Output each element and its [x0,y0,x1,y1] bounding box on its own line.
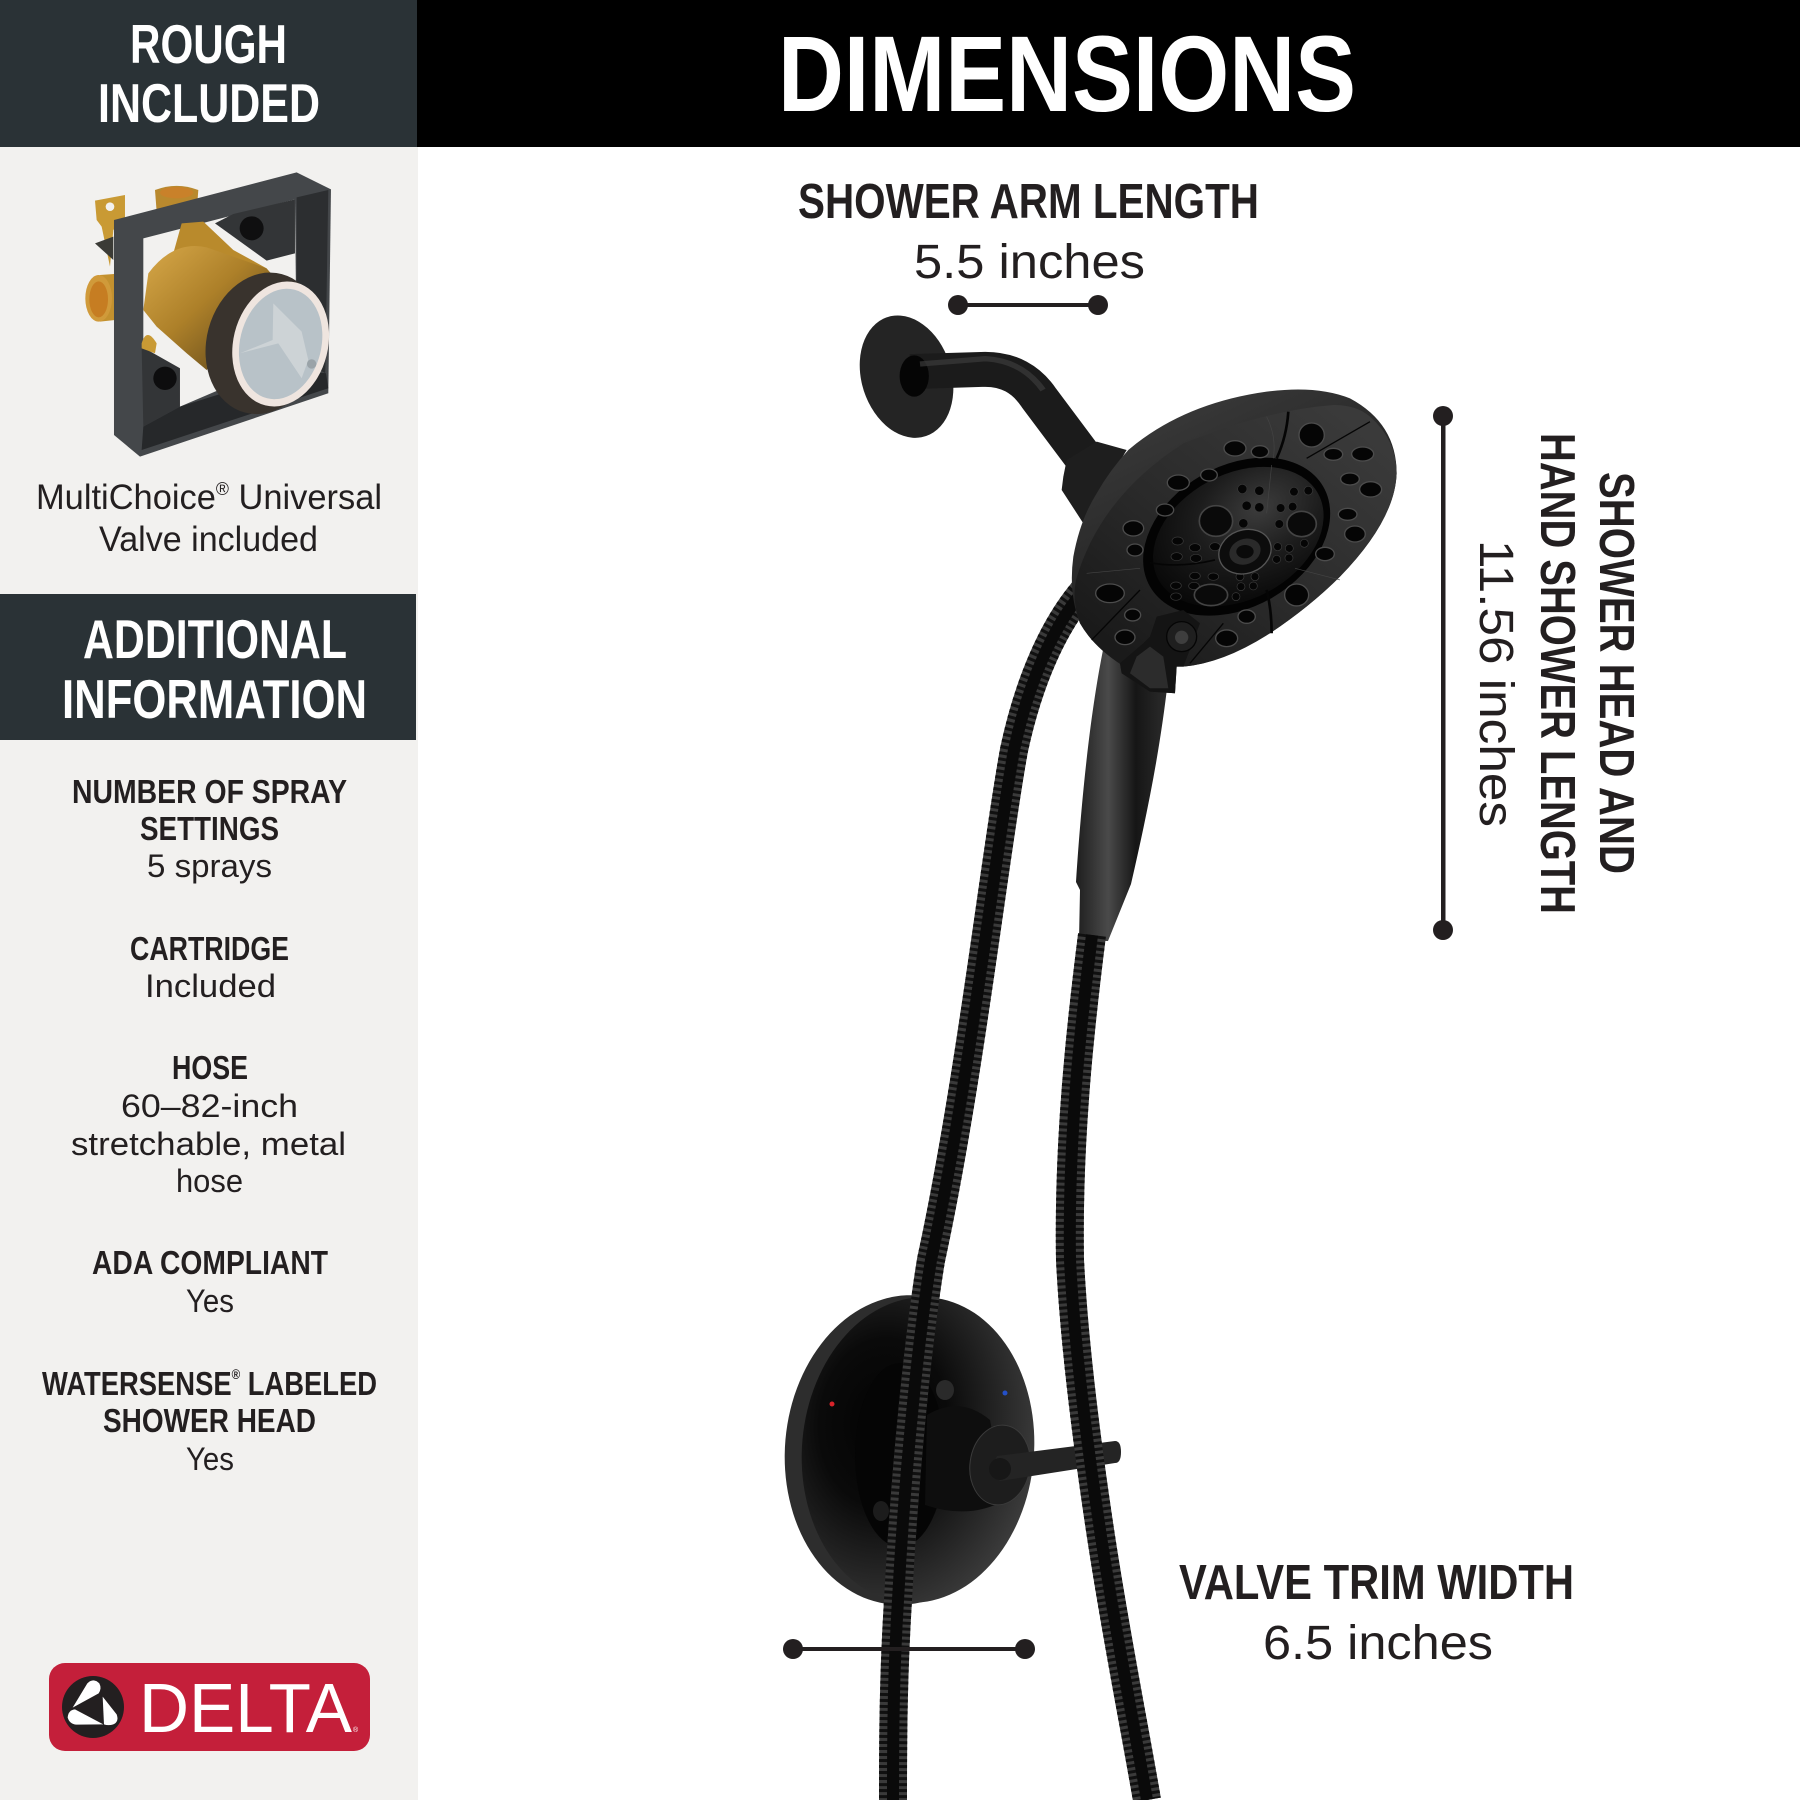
text: hose: HOSE [172,1049,248,1086]
text: valve caption: Valve included [99,520,318,559]
text: hose: stretchable, metal [71,1126,346,1162]
text: valve caption: ® [216,479,229,499]
text: valve trim width [1179,1556,1574,1670]
text: shower head and hand shower length: 11.56 inches [1469,540,1522,827]
text: WaterSense labeled: SHOWER HEAD [103,1402,316,1439]
dimension line: valve trim [783,1639,1035,1659]
panel: rough included heading: ROUGH [130,13,287,75]
text: spray settings: 5 sprays [147,848,272,884]
text: WaterSense labeled [42,1365,377,1477]
valve trim plate [772,1285,1121,1615]
text: ADA compliant: Yes [186,1283,234,1319]
left hose [893,590,1084,1800]
panel: rough included heading: INCLUDED [98,72,320,134]
text: WaterSense labeled: WATERSENSE [42,1365,271,1402]
text: valve trim width: VALVE TRIM WIDTH [1179,1556,1574,1610]
text: WaterSense labeled: LABELED [240,1365,377,1402]
text: shower arm length [798,175,1259,289]
text: valve caption: MultiChoice [36,478,219,517]
panel: sidebar background [0,0,418,1800]
text: shower head and hand shower length: SHOWER HEAD AND [1589,472,1643,874]
text: spray settings [72,773,347,884]
text: cartridge: CARTRIDGE [130,930,289,967]
panel: additional information heading [0,594,416,740]
title banner: DIMENSIONS [778,13,1356,134]
panel: additional information heading: INFORMATION [62,668,367,730]
dimension line: shower arm [948,295,1108,315]
text: cartridge: Included [145,968,276,1004]
shower arm and flange [847,308,1085,460]
shower head [1062,389,1397,693]
hand shower handle [1076,650,1168,941]
text: valve caption [36,478,382,559]
panel: additional information heading: ADDITIONAL [83,608,347,670]
text: valve trim width: 6.5 inches [1263,1617,1493,1670]
logo: Delta: DELTA [139,1669,352,1747]
text: spray settings: NUMBER OF SPRAY [72,773,347,810]
dimension line: hand shower length [1433,406,1453,940]
logo: Delta: ® [353,1726,359,1734]
text: WaterSense labeled: ® [232,1366,241,1382]
logo: Delta [49,1663,370,1751]
text: valve caption: Universal [229,478,382,517]
text: hose: hose [176,1163,243,1199]
title banner [417,0,1800,147]
text: hose [71,1049,346,1199]
icon: rough-in valve [85,172,342,457]
panel: rough included heading [0,0,417,147]
text: ADA compliant [92,1244,328,1319]
text: hose: 60–82-inch [121,1088,298,1124]
text: shower arm length: SHOWER ARM LENGTH [798,175,1259,229]
text: shower head and hand shower length: HAND SHOWER LENGTH [1530,433,1584,914]
text: cartridge [130,930,289,1004]
right hose [1070,935,1147,1800]
text: ADA compliant: ADA COMPLIANT [92,1244,328,1281]
text: shower arm length: 5.5 inches [914,236,1145,289]
text: WaterSense labeled: Yes [186,1441,234,1477]
text: shower head and hand shower length [1469,433,1643,914]
text: spray settings: SETTINGS [140,810,279,847]
